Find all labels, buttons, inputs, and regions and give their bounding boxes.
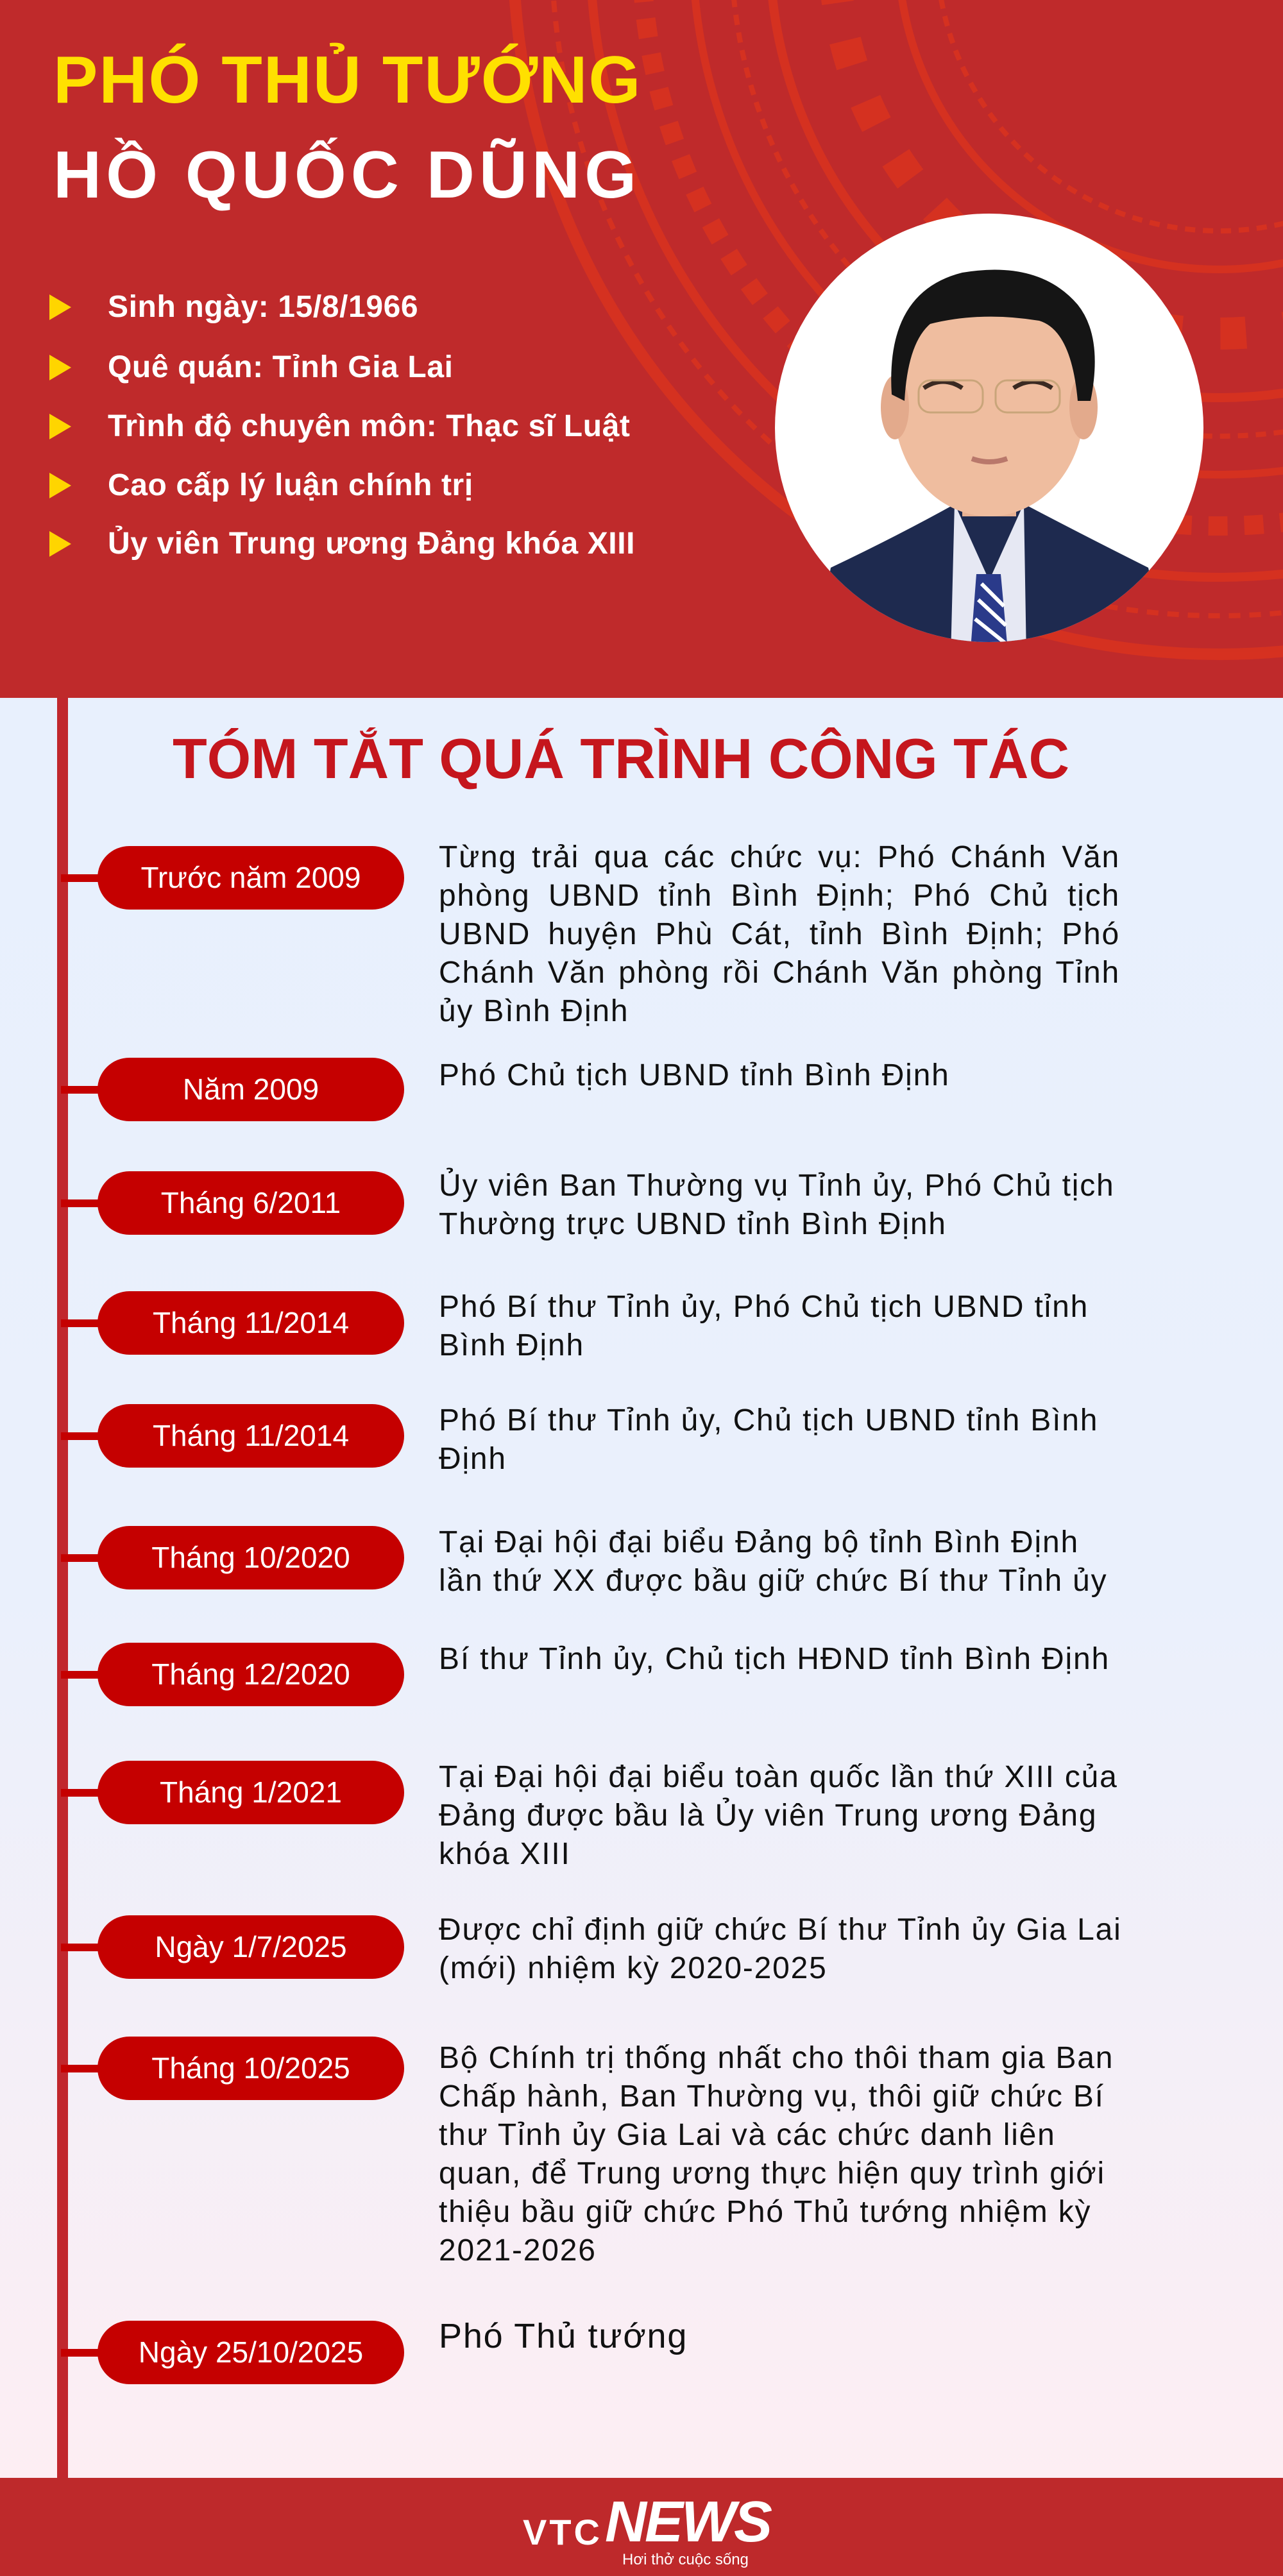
text: 1/2021: Tại Đại hội đại biểu toàn quốc lần thứ XIII của [439,1760,1118,1794]
text: before 2009: ủy Bình Định [439,994,629,1028]
text: 10/2020: Tại Đại hội đại biểu Đảng bộ tỉnh Bình Định [439,1525,1079,1559]
logo: VTC NEWS: VTC [523,2512,602,2552]
text: 1/7/2025: Được chỉ định giữ chức Bí thư Tỉnh ủy Gia Lai [439,1913,1122,1947]
item: 10/2020 [61,1526,404,1589]
item: 10/2025: Tháng 10/2025 [151,2051,350,2085]
text: 10/2025: 2021-2026 [439,2233,597,2267]
logo: VTC NEWS: NEWS [605,2490,770,2554]
item: 10/2020: Tháng 10/2020 [151,1541,350,1574]
item: 25/10/2025 [61,2321,404,2384]
text: 1/7/2025: (mới) nhiệm kỳ 2020-2025 [439,1951,828,1985]
item: 12/2020: Tháng 12/2020 [151,1657,350,1691]
text: 10/2020 [439,1525,1107,1598]
text: 6/2011 [439,1167,1115,1241]
text: 6/2011: Ủy viên Ban Thường vụ Tỉnh ủy, Phó Chủ tịch [439,1169,1115,1203]
bullet: political theory: Cao cấp lý luận chính trị [108,468,473,502]
logo: VTC NEWS: Hơi thở cuộc sống [622,2551,749,2568]
item: 1/2021: Tháng 1/2021 [160,1775,342,1809]
title line 2: HỒ QUỐC DŨNG [53,138,641,212]
text: 1/2021: khóa XIII [439,1837,571,1871]
text: 1/7/2025 [439,1913,1122,1985]
text: 10/2020: lần thứ XX được bầu giữ chức Bí thư Tỉnh ủy [439,1564,1107,1598]
item: 25/10/2025: Ngày 25/10/2025 [139,2335,363,2369]
item: 2009 [61,1058,404,1121]
bullet: hometown: Quê quán: Tỉnh Gia Lai [108,350,454,384]
text: 1/2021 [439,1760,1118,1871]
item: 11/2014 a [61,1291,404,1355]
title line 1: PHÓ THỦ TƯỚNG [53,43,642,117]
text: 12/2020: Bí thư Tỉnh ủy, Chủ tịch HĐND tỉnh Bình Định [439,1642,1110,1676]
item: 2009: Năm 2009 [183,1072,319,1106]
text: 10/2025 [439,2041,1114,2267]
footer [0,2478,1283,2576]
text: 10/2025: thiệu bầu giữ chức Phó Thủ tướng nhiệm kỳ [439,2195,1091,2229]
bullet: education: Trình độ chuyên môn: Thạc sĩ Luật [108,409,631,443]
portrait photo [775,214,1203,642]
item: 10/2025 [61,2037,404,2100]
item: 6/2011 [61,1171,404,1235]
item: 11/2014 b: Tháng 11/2014 [153,1419,349,1452]
item: 6/2011: Tháng 6/2011 [161,1186,341,1219]
text: 10/2025: thư Tỉnh ủy Gia Lai và các chức danh liên [439,2118,1056,2152]
text: before 2009: phòng UBND tỉnh Bình Định; Phó Chủ tịch [439,879,1120,913]
text: before 2009: Từng trải qua các chức vụ: Phó Chánh Văn [439,840,1120,874]
bullet: central committee: Ủy viên Trung ương Đảng khóa XIII [108,527,635,561]
text: before 2009: UBND huyện Phù Cát, tỉnh Bình Định; Phó [439,917,1120,951]
text: 11/2014 a: Phó Bí thư Tỉnh ủy, Phó Chủ tịch UBND tỉnh [439,1290,1089,1324]
section heading: TÓM TẮT QUÁ TRÌNH CÔNG TÁC [173,727,1069,790]
text: 11/2014 b: Định [439,1442,507,1476]
item: before 2009 [61,846,404,910]
item: 1/7/2025: Ngày 1/7/2025 [155,1930,347,1963]
text: 11/2014 a: Bình Định [439,1328,584,1362]
timeline background [0,698,1283,2478]
decorative drum pattern [509,0,1283,660]
text: before 2009 [439,840,1120,1028]
timeline vertical line [57,698,68,2478]
text: 10/2025: Bộ Chính trị thống nhất cho thôi tham gia Ban [439,2041,1114,2075]
text: 2009: Phó Chủ tịch UBND tỉnh Bình Định [439,1058,950,1092]
text: 10/2025: quan, để Trung ương thực hiện quy trình giới [439,2157,1105,2190]
text: 25/10/2025: Phó Thủ tướng [439,2317,688,2355]
text: 11/2014 a [439,1290,1089,1362]
item: before 2009: Trước năm 2009 [140,861,361,894]
text: 11/2014 b [439,1403,1098,1476]
item: 1/2021 [61,1761,404,1824]
item: 11/2014 a: Tháng 11/2014 [153,1306,349,1339]
text: 11/2014 b: Phó Bí thư Tỉnh ủy, Chủ tịch UBND tỉnh Bình [439,1403,1098,1437]
text: 6/2011: Thường trực UBND tỉnh Bình Định [439,1207,947,1241]
item: 11/2014 b [61,1404,404,1468]
header panel [0,0,1283,698]
text: 10/2025: Chấp hành, Ban Thường vụ, thôi giữ chức Bí [439,2080,1105,2114]
item: 12/2020 [61,1643,404,1706]
item: 1/7/2025 [61,1915,404,1979]
logo: VTC NEWS [523,2490,772,2568]
text: before 2009: Chánh Văn phòng rồi Chánh Văn phòng Tỉnh [439,956,1120,990]
text: 1/2021: Đảng được bầu là Ủy viên Trung ương Đảng [439,1799,1097,1833]
bullet: birth: Sinh ngày: 15/8/1966 [108,290,418,324]
